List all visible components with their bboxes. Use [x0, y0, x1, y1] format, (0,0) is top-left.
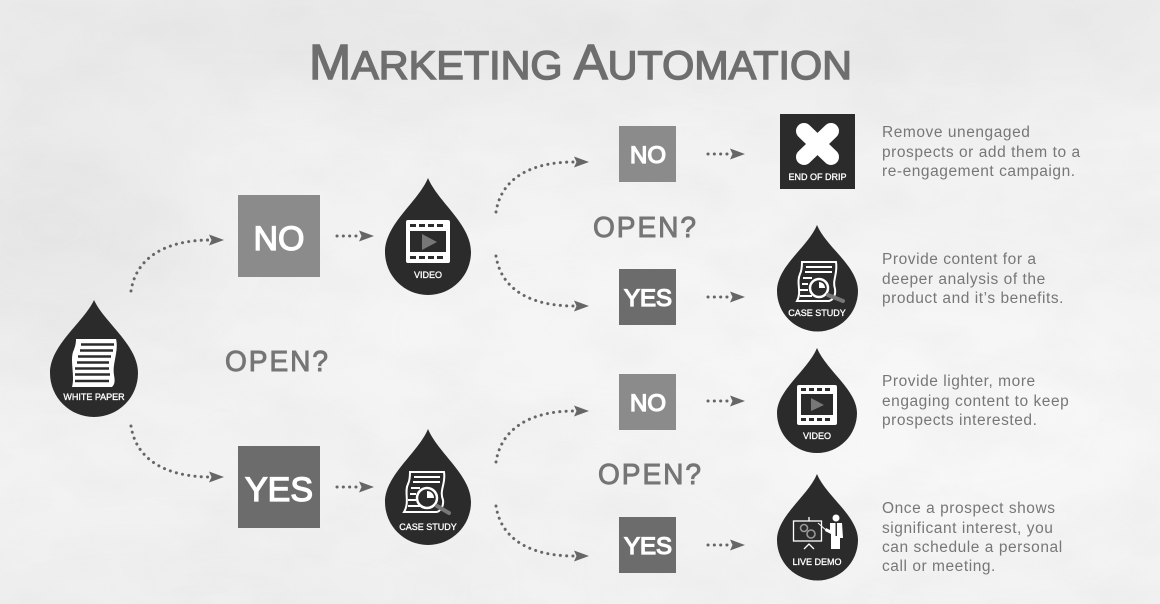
arrow: no to video small [708, 396, 745, 406]
question label: case study open: OPEN? [598, 459, 703, 491]
large no box [238, 195, 320, 277]
small no box top [619, 126, 676, 182]
small no box lower [619, 374, 676, 430]
small no box top: NO [630, 142, 666, 169]
icon: end of drip: END OF DRIP [788, 172, 847, 182]
description: video: prospects interested. [882, 412, 1037, 429]
large yes box: YES [245, 471, 313, 509]
arrow: yes to live demo [708, 540, 745, 550]
description: live demo: significant interest, you [882, 520, 1053, 537]
arrow: case study to yes [496, 506, 589, 562]
arrow: video to yes [496, 256, 589, 312]
icon: video drop large [385, 178, 471, 295]
icon: case study drop small: CASE STUDY [788, 308, 846, 318]
icon: live demo drop: LIVE DEMO [792, 557, 842, 567]
small no box lower: NO [630, 390, 666, 417]
description: end of drip: Remove unengaged [882, 124, 1030, 141]
icon: video drop large: VIDEO [414, 270, 442, 280]
description: live demo: can schedule a personal [882, 539, 1063, 556]
icon: video drop small: VIDEO [803, 431, 831, 441]
small yes box bottom: YES [624, 533, 672, 560]
description: case study: deeper analysis of the [882, 271, 1046, 288]
icon: white paper drop [50, 300, 138, 417]
description: case study: product and it’s benefits. [882, 290, 1064, 307]
description: video: engaging content to keep [882, 393, 1069, 410]
icon: white paper drop: WHITE PAPER [63, 392, 125, 402]
large no box: NO [254, 220, 304, 258]
icon: video drop small [777, 348, 857, 453]
small yes box upper: YES [624, 285, 672, 312]
icon: end of drip [780, 114, 855, 189]
arrow: video to no [496, 156, 589, 212]
question label: video open: OPEN? [593, 212, 698, 244]
description: end of drip: prospects or add them to a [882, 144, 1081, 161]
arrow: white paper to no [131, 234, 224, 291]
description: live demo: Once a prospect shows [882, 500, 1056, 517]
title: MARKETING AUTOMATION [309, 36, 852, 90]
small yes box bottom [619, 517, 676, 573]
arrow: no to end of drip [708, 148, 745, 160]
arrow: case study to no [496, 406, 589, 462]
large yes box [238, 446, 320, 528]
icon: case study drop small [777, 225, 858, 332]
question label: first open: OPEN? [225, 346, 330, 378]
description: case study: Provide content for a [882, 251, 1037, 268]
arrow: no to video [337, 230, 374, 242]
icon: case study drop large [385, 429, 471, 545]
icon: case study drop large: CASE STUDY [399, 522, 457, 532]
icon: live demo drop [777, 474, 858, 580]
arrow: yes to case study [337, 482, 374, 492]
description: live demo: call or meeting. [882, 558, 996, 575]
arrow: white paper to yes [131, 426, 224, 482]
small yes box upper [619, 269, 676, 325]
description: video: Provide lighter, more [882, 373, 1036, 390]
description: end of drip: re-engagement campaign. [882, 163, 1076, 180]
arrow: yes to case study small [708, 292, 745, 302]
